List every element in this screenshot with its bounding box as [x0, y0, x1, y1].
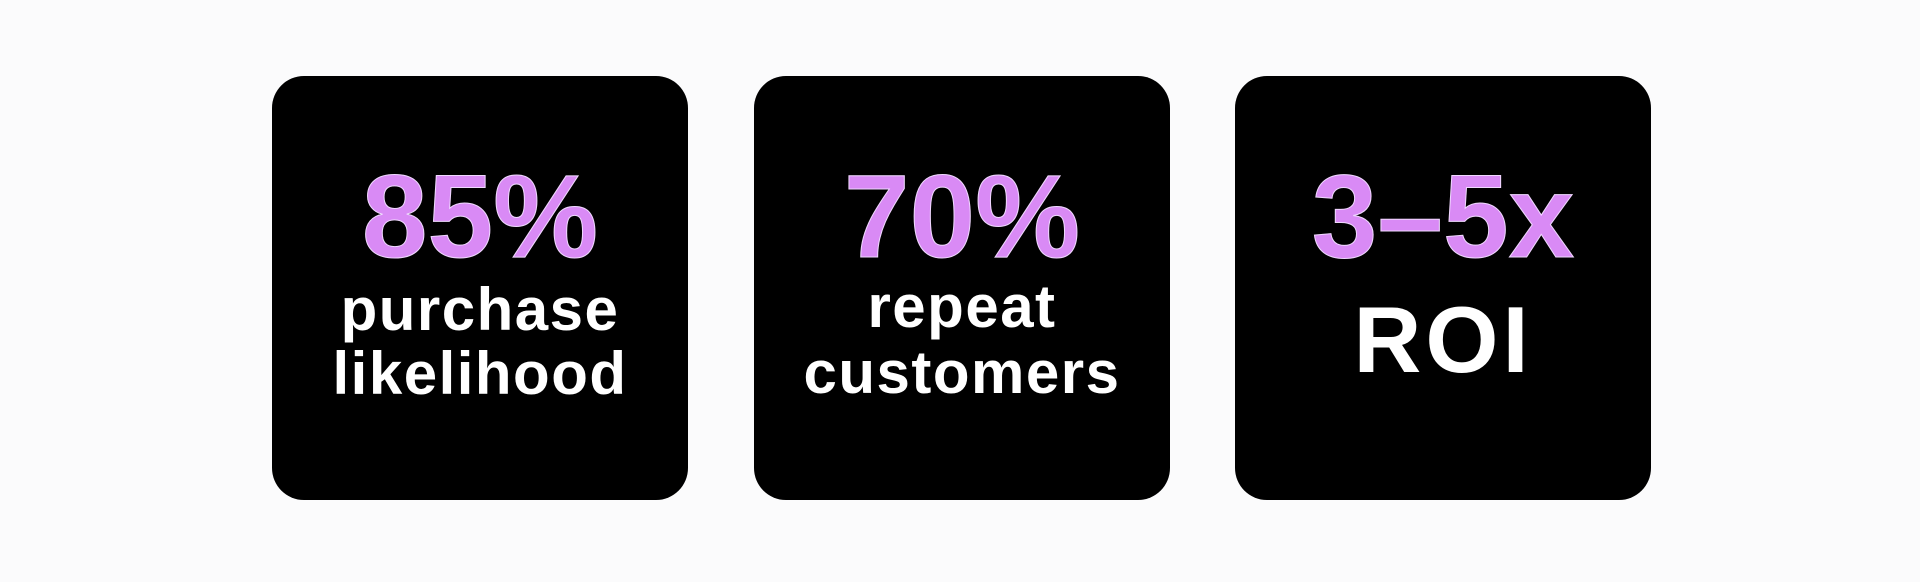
stat: 70%: 70%: [844, 151, 1080, 283]
panel: repeat customers: [754, 76, 1170, 500]
panel: ROI: [1235, 76, 1651, 500]
stat: 3–5x: 3–5x: [1312, 151, 1574, 283]
panel: purchase likelihood: [272, 76, 688, 500]
label: likelihood: likelihood: [332, 340, 628, 407]
stat: 85%: 85%: [362, 151, 598, 283]
label: customers: customers: [804, 339, 1120, 406]
label: repeat: repeat: [867, 273, 1057, 340]
label: ROI: ROI: [1353, 287, 1533, 392]
label: purchase: purchase: [341, 276, 619, 343]
